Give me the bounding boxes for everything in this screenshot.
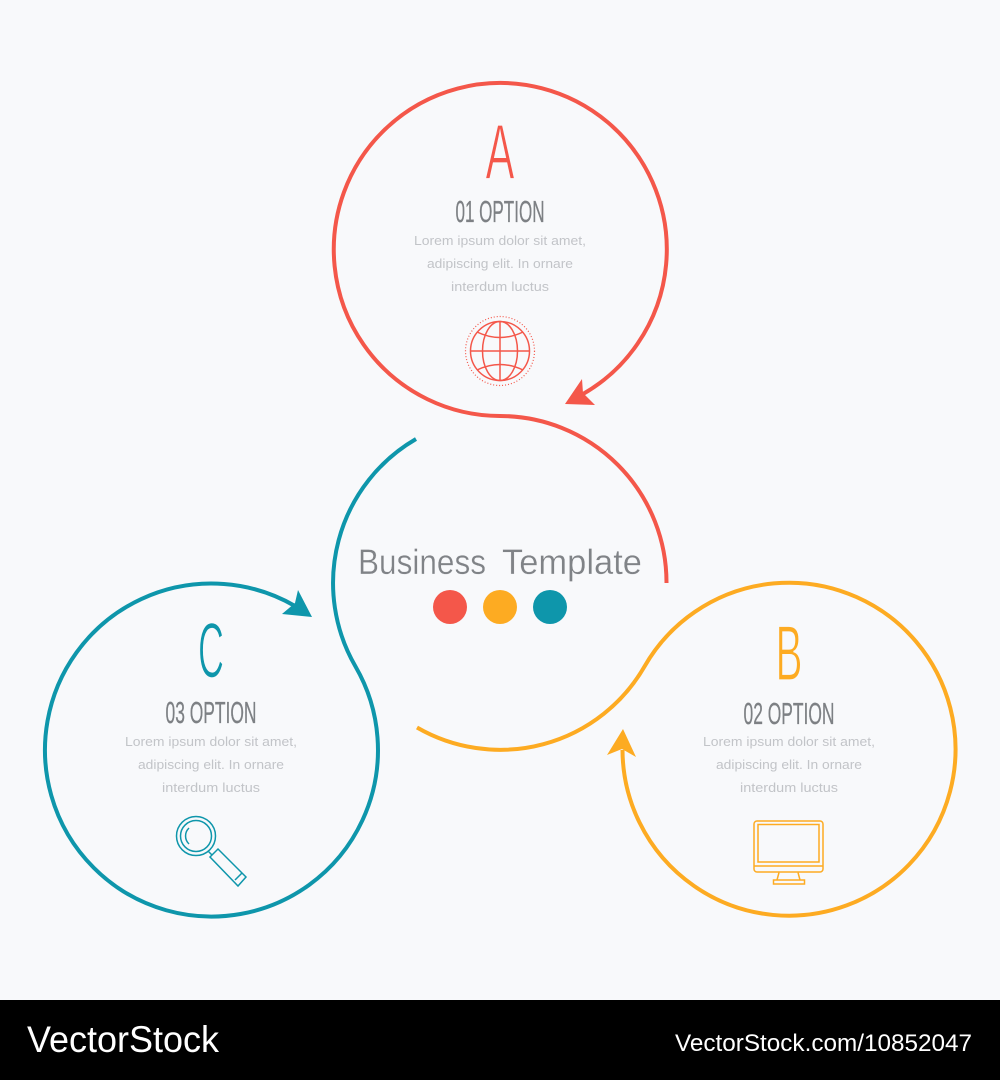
heading: 03 option: 03 OPTION <box>166 695 256 730</box>
arrowhead: teal <box>282 590 312 617</box>
icon: globe <box>466 316 534 386</box>
text block: option 2: interdum luctus <box>740 781 838 795</box>
heading: 02 option: 02 OPTION <box>744 696 834 731</box>
heading: 01 option: 01 OPTION <box>456 194 544 229</box>
footer logo text: VectorStock <box>27 1019 219 1060</box>
text block: option 1 <box>414 234 586 294</box>
icon: monitor <box>754 821 823 884</box>
text block: option 1: Lorem ipsum dolor sit amet, <box>414 234 586 248</box>
text block: option 3: interdum luctus <box>162 781 260 795</box>
footer bar <box>0 1000 1000 1080</box>
text block: option 2: adipiscing elit. In ornare <box>716 758 862 772</box>
text block: option 2: Lorem ipsum dolor sit amet, <box>703 735 875 749</box>
panel: C teal loop: C <box>198 606 224 694</box>
text block: option 2 <box>703 735 875 795</box>
icon: magnifier <box>176 816 246 886</box>
arrowhead: yellow <box>607 729 636 757</box>
heading: Business Template: Template <box>502 543 642 582</box>
text block: option 3: adipiscing elit. In ornare <box>138 758 284 772</box>
dot: yellow <box>483 590 517 624</box>
footer url: VectorStock.com/10852047 <box>675 1030 972 1057</box>
text block: option 1: interdum luctus <box>451 280 549 294</box>
text block: option 1: adipiscing elit. In ornare <box>427 257 573 271</box>
panel: C teal loop <box>45 439 416 917</box>
letter A: A <box>486 108 514 196</box>
arrowhead: red <box>565 379 595 405</box>
arrow path: red <box>334 83 667 583</box>
heading: Business Template: Business <box>358 543 486 582</box>
center title block <box>358 543 642 624</box>
dot: red <box>433 590 467 624</box>
panel: A red loop <box>334 83 667 583</box>
letter B: B <box>776 609 802 697</box>
text block: option 3 <box>125 735 297 795</box>
dot: teal <box>533 590 567 624</box>
text block: option 3: Lorem ipsum dolor sit amet, <box>125 735 297 749</box>
arrow path: teal <box>45 439 416 917</box>
arrow path: yellow <box>417 583 955 916</box>
panel: B yellow loop <box>417 583 955 916</box>
heading: Business Template <box>358 543 642 582</box>
